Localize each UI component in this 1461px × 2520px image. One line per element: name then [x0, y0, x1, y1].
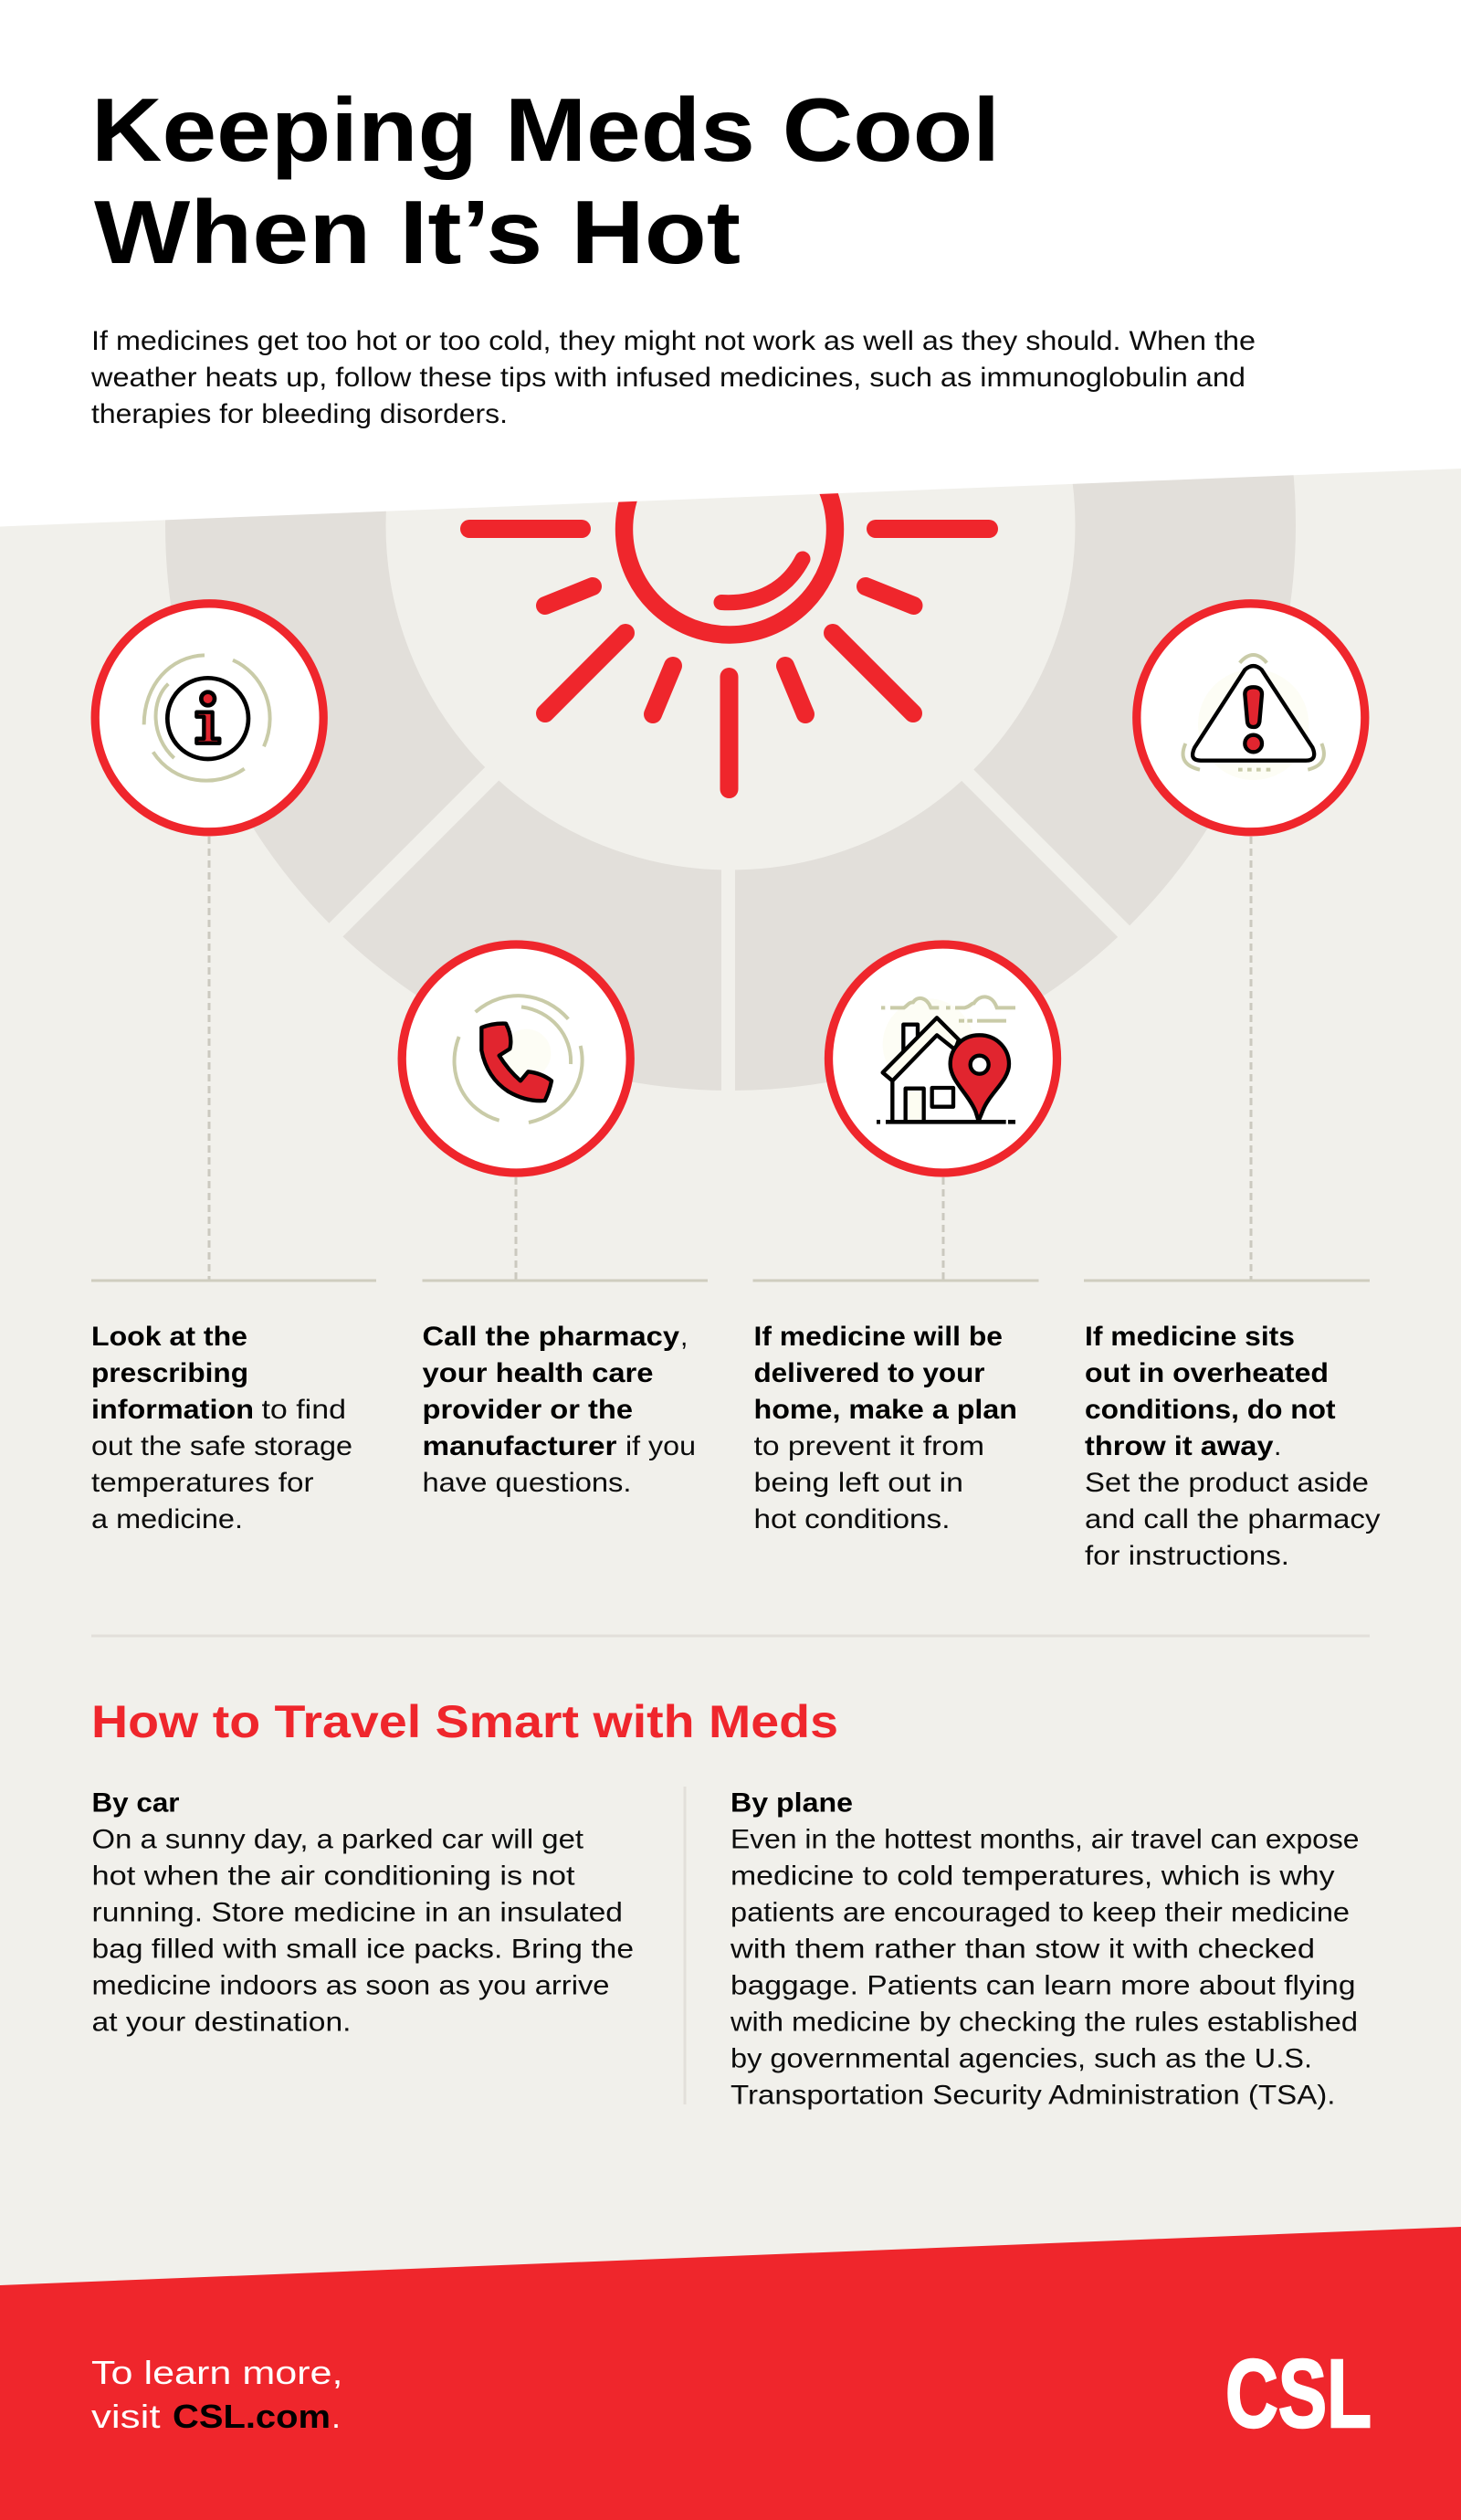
tip 3: home delivery plan: to prevent it from [754, 1431, 984, 1461]
tip 4: overheated medicine: out in overheated [1085, 1358, 1329, 1388]
logo: CSL: CSL [1225, 2340, 1372, 2448]
tip 2: call the pharmacy: if you [625, 1431, 696, 1461]
text block: by car: By car [91, 1788, 180, 1819]
text block: by car: On a sunny day, a parked car will get [91, 1825, 584, 1855]
text block: by car: at your destination. [91, 2008, 351, 2038]
tip 1: prescribing information: prescribing [91, 1358, 248, 1388]
text block: by car: bag filled with small ice packs. Bring the [91, 1935, 634, 1965]
tip 2: call the pharmacy: , [680, 1322, 688, 1352]
tip 2: call the pharmacy: have questions. [422, 1468, 632, 1498]
icon: information badge [95, 604, 323, 832]
text block: by plane: medicine to cold temperatures, which is why [730, 1861, 1335, 1892]
semicircular band behind the sun [276, 70, 1185, 1101]
tip 2: call the pharmacy [422, 1322, 696, 1498]
tip 4: overheated medicine: throw it away [1085, 1431, 1274, 1461]
text block: by plane [730, 1788, 1359, 2111]
tip 1: prescribing information: out the safe storage [91, 1431, 352, 1461]
footer band [0, 2227, 1461, 2520]
text block: by plane: with them rather than stow it with checked [730, 1935, 1315, 1965]
tip 2: call the pharmacy: manufacturer [422, 1431, 617, 1461]
footer call to action: To learn more, [91, 2354, 343, 2391]
tip 1: prescribing information: temperatures for [91, 1468, 314, 1498]
tip 4: overheated medicine: . [1274, 1431, 1281, 1461]
tip 4: overheated medicine: for instructions. [1085, 1541, 1289, 1571]
tip 3: home delivery plan: If medicine will be [754, 1322, 1003, 1352]
tip 2: call the pharmacy: your health care [422, 1358, 654, 1388]
icon: warning triangle badge [1137, 604, 1365, 832]
tip 1: prescribing information: information [91, 1395, 254, 1425]
title: When It’s Hot [94, 182, 741, 282]
tip 4: overheated medicine: conditions, do not [1085, 1395, 1336, 1425]
title [91, 79, 1000, 282]
text block: by plane: Transportation Security Administration (TSA). [730, 2081, 1335, 2111]
tip 3: home delivery plan: home, make a plan [754, 1395, 1017, 1425]
text block: by plane: by governmental agencies, such as the U.S. [730, 2044, 1312, 2074]
footer call to action: . [331, 2398, 341, 2435]
tip 3: home delivery plan: being left out in [754, 1468, 963, 1498]
heading: how to travel: How to Travel Smart with Meds [91, 1696, 838, 1747]
white header background [0, 0, 1461, 526]
tip 1: prescribing information: a medicine. [91, 1504, 243, 1534]
text block: by car: hot when the air conditioning is not [91, 1861, 575, 1892]
text block: by plane: By plane [730, 1788, 853, 1819]
footer call to action: CSL.com [173, 2398, 331, 2435]
icon: house with location pin badge [829, 944, 1057, 1173]
footer call to action [91, 2354, 343, 2435]
text block: by plane: with medicine by checking the rules established [730, 2008, 1358, 2038]
tip 4: overheated medicine: Set the product aside [1085, 1468, 1369, 1498]
tip 4: overheated medicine: If medicine sits [1085, 1322, 1295, 1352]
text block: by car [91, 1788, 634, 2038]
tip 4: overheated medicine: and call the pharmacy [1085, 1504, 1381, 1534]
tip 1: prescribing information: to find [261, 1395, 346, 1425]
tip 4: overheated medicine [1085, 1322, 1381, 1571]
icon: sun [469, 424, 989, 789]
text block: by plane: patients are encouraged to keep their medicine [730, 1898, 1350, 1928]
intro paragraph [90, 326, 1256, 429]
text block: by car: running. Store medicine in an insulated [91, 1898, 623, 1928]
footer call to action: visit [91, 2398, 161, 2435]
tip 1: prescribing information [91, 1322, 352, 1534]
icon: phone badge [402, 944, 630, 1173]
tip 2: call the pharmacy: Call the pharmacy [422, 1322, 679, 1352]
tip 3: home delivery plan: delivered to your [754, 1358, 985, 1388]
title: Keeping Meds Cool [91, 79, 1000, 180]
tip 3: home delivery plan: hot conditions. [754, 1504, 950, 1534]
intro paragraph: weather heats up, follow these tips with infused medicines, such as immunoglobulin and [90, 363, 1246, 393]
tip 3: home delivery plan [754, 1322, 1017, 1534]
dashed connector lines and column rules [91, 837, 1370, 1281]
tip 1: prescribing information: Look at the [91, 1322, 247, 1352]
text block: by plane: Even in the hottest months, air travel can expose [730, 1825, 1359, 1855]
tip 2: call the pharmacy: provider or the [422, 1395, 633, 1425]
intro paragraph: therapies for bleeding disorders. [91, 399, 508, 429]
text block: by car: medicine indoors as soon as you arrive [91, 1971, 610, 2001]
intro paragraph: If medicines get too hot or too cold, they might not work as well as they should. When the [91, 326, 1256, 356]
text block: by plane: baggage. Patients can learn more about flying [730, 1971, 1355, 2001]
